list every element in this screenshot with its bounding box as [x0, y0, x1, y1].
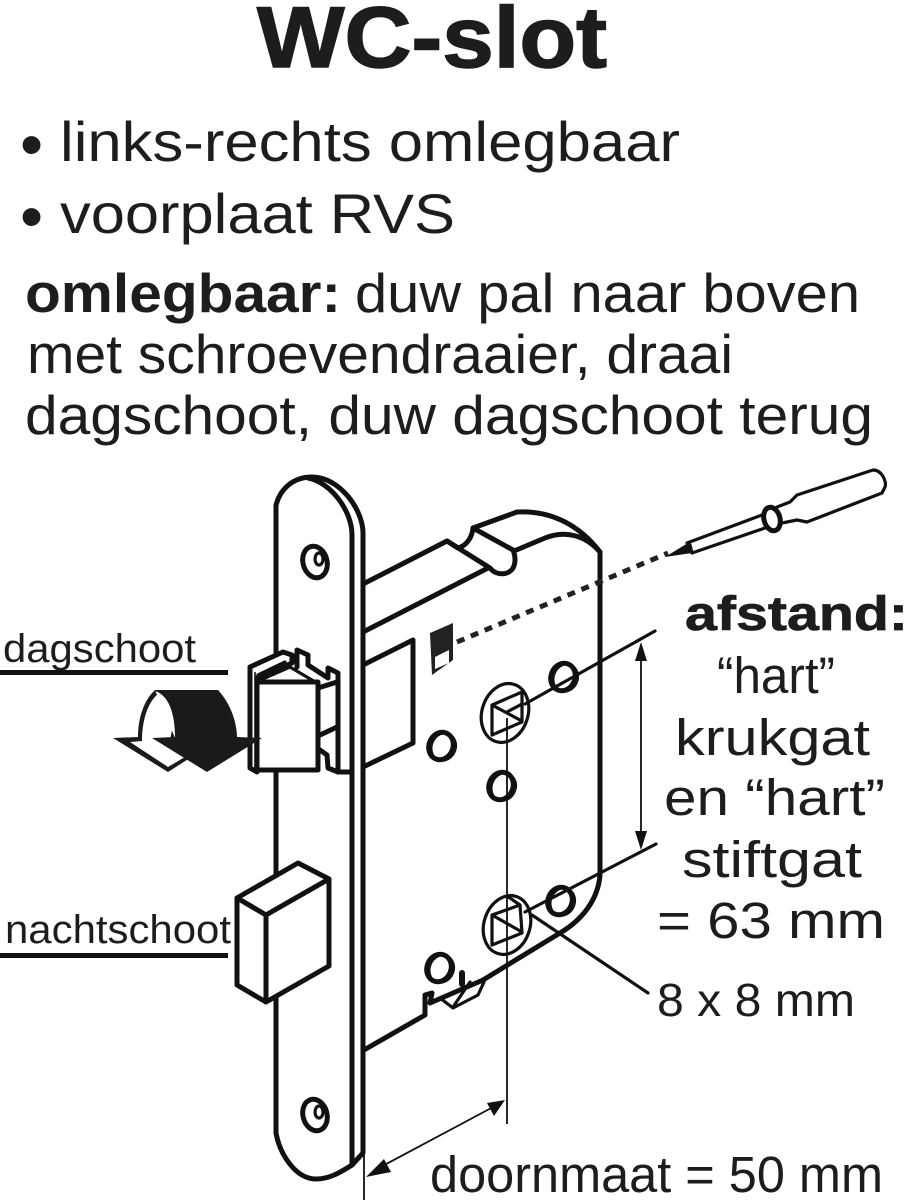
label: afstand: “hart”: [717, 647, 835, 704]
instructions text: [25, 262, 873, 446]
screw holes: [423, 660, 582, 986]
icon: lock lever: [430, 623, 453, 675]
label: 8 x 8 mm: 8 x 8 mm: [657, 974, 855, 1026]
nachtschoot bolt: [237, 863, 329, 1002]
screw bottom: [299, 1096, 331, 1134]
instructions text: duw pal naar boven: [355, 262, 860, 324]
label: afstand: [657, 588, 907, 949]
screw top: [299, 543, 331, 581]
feature bullets: •: [20, 107, 43, 181]
label: afstand: = 63 mm: [657, 892, 885, 949]
icon: screwdriver: [665, 470, 885, 557]
instructions text: met schroevendraaier, draai: [27, 323, 733, 385]
faceplate: [276, 477, 363, 1179]
spindle hole bottom: [476, 889, 538, 961]
dimension: doornmaat: [364, 718, 507, 1200]
instructions text: omlegbaar:: [25, 262, 341, 324]
dotted line to lever: [457, 553, 668, 642]
label: afstand: afstand:: [685, 588, 907, 641]
label: afstand: en “hart”: [664, 769, 885, 826]
dagschoot latch: [250, 650, 350, 772]
feature bullets: links-rechts omlegbaar: [60, 110, 680, 173]
dimension: 8 x 8 mm pointer: [532, 915, 648, 993]
instructions text: dagschoot, duw dagschoot terug: [25, 384, 873, 446]
latch notch detail: [440, 973, 484, 1008]
label: nachtschoot: nachtschoot: [5, 908, 231, 952]
dimension: 63 mm: [525, 631, 656, 912]
feature bullets: [20, 107, 680, 253]
arrow: rotate latch: [113, 690, 262, 772]
spindle hole top: [474, 677, 536, 749]
lock body: [363, 512, 668, 1050]
feature bullets: voorplaat RVS: [60, 182, 455, 245]
label: dagschoot: dagschoot: [3, 627, 196, 671]
label: afstand: krukgat: [675, 709, 870, 766]
feature bullets: •: [20, 179, 43, 253]
label: afstand: stiftgat: [682, 831, 862, 888]
